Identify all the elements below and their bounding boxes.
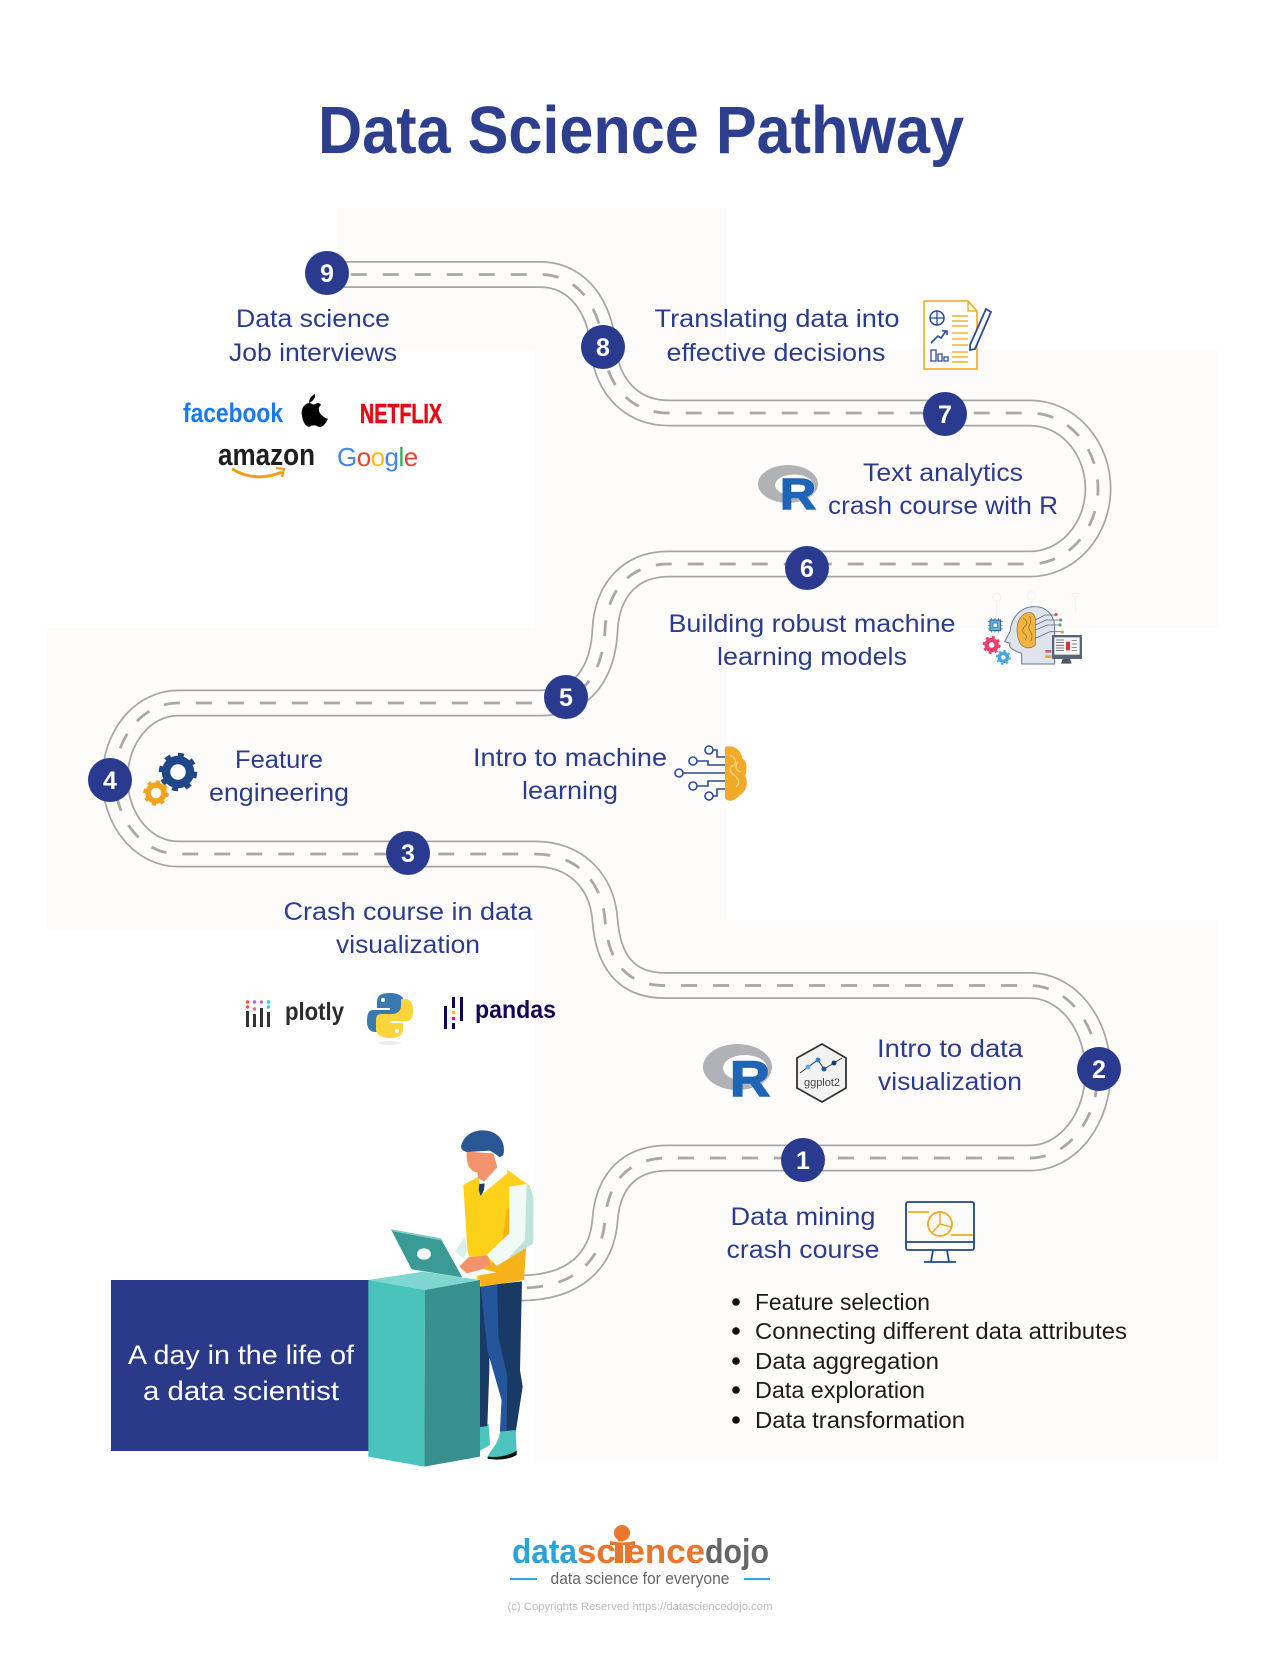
- logo: apple: [302, 394, 328, 427]
- step 5 marker: 5: [559, 684, 573, 712]
- bullet list: Data transformation: [755, 1407, 965, 1433]
- label: step 4: [209, 746, 349, 807]
- step 5 marker: [544, 675, 588, 719]
- logo: pandas: pandas: [475, 996, 556, 1024]
- label: step 9: [229, 305, 397, 367]
- step 9 marker: 9: [320, 260, 334, 288]
- step 7 marker: 7: [938, 401, 952, 429]
- step 4 marker: [88, 758, 132, 802]
- step 9 marker: [305, 251, 349, 295]
- step 1 marker: [781, 1138, 825, 1182]
- logo: amazon: amazon: [218, 437, 315, 472]
- brand logo: [510, 1525, 770, 1588]
- head: [461, 1130, 504, 1182]
- label: step 8: [654, 305, 900, 367]
- bullet list: [732, 1289, 1127, 1433]
- logo: google: Google: [337, 442, 418, 472]
- step 2 marker: 2: [1092, 1056, 1106, 1084]
- logo: plotly: plotly: [285, 998, 344, 1026]
- copyright line: (c) Copyrights Reserved https://datasciencedojo.com: [508, 1601, 772, 1613]
- icon: circuit brain: [675, 746, 747, 801]
- logo: facebook: facebook: [183, 398, 284, 428]
- brand logo: dojo: [705, 1533, 769, 1571]
- icon: R logo large: R: [730, 1051, 770, 1107]
- logo: python: [367, 993, 413, 1045]
- label: step 3: visualization: [336, 931, 480, 959]
- step 2 marker: [1077, 1047, 1121, 1091]
- label: step 2: Intro to data: [877, 1035, 1023, 1063]
- label: step 8: effective decisions: [666, 339, 886, 367]
- rear sleeve: [455, 1237, 467, 1258]
- illustration: data scientist at laptop: [368, 1130, 533, 1467]
- logo: plotly: [246, 998, 344, 1027]
- desk pedestal: [368, 1272, 480, 1467]
- logo: netflix: NETFLIX: [360, 398, 442, 429]
- label: step 6: [668, 610, 956, 671]
- label: step 7: [828, 459, 1058, 520]
- step 1 marker: 1: [796, 1147, 810, 1175]
- title: Data Science Pathway: [318, 93, 964, 168]
- back shoe: [478, 1424, 490, 1452]
- label: step 3: Crash course in data: [284, 898, 533, 926]
- step 3 marker: 3: [401, 840, 415, 868]
- company logos: [183, 394, 442, 477]
- step 7 marker: [923, 392, 967, 436]
- icon: report and pencil: [924, 301, 991, 369]
- label: step 9: Data science: [236, 305, 390, 333]
- step 8 marker: [581, 325, 625, 369]
- bullet list: Data exploration: [755, 1377, 925, 1403]
- label: step 5: [473, 744, 667, 805]
- label: step 3: [284, 898, 533, 959]
- label: step 4: engineering: [209, 779, 349, 807]
- label: step 2: [877, 1035, 1023, 1096]
- label: step 4: Feature: [235, 746, 323, 774]
- bullet list: Data aggregation: [755, 1348, 939, 1374]
- step 3 marker: [386, 831, 430, 875]
- step 6 marker: 6: [800, 555, 814, 583]
- label: step 8: Translating data into: [654, 305, 900, 333]
- callout box: a day in the life: [111, 1280, 371, 1451]
- step 6 marker: [785, 546, 829, 590]
- label: step 5: Intro to machine: [473, 744, 667, 772]
- label: step 1: [726, 1203, 880, 1264]
- step 4 marker: 4: [103, 767, 117, 795]
- brand logo: science: [577, 1533, 705, 1571]
- label: step 1: Data mining: [730, 1203, 876, 1231]
- icon: AI head: [984, 592, 1082, 664]
- bullet list: Feature selection: [755, 1289, 930, 1315]
- label: step 6: learning models: [717, 643, 907, 671]
- torso: [463, 1167, 530, 1287]
- step 8 marker: 8: [596, 334, 610, 362]
- label: step 5: learning: [522, 777, 618, 805]
- logo: pandas: [444, 996, 556, 1029]
- label: step 7: Text analytics: [863, 459, 1023, 487]
- front shoe: [488, 1430, 517, 1458]
- icon: gears: [145, 755, 195, 804]
- callout box: a day in the life: a data scientist: [143, 1376, 340, 1406]
- trousers: [478, 1281, 523, 1433]
- brand logo: data science for everyone: [550, 1569, 730, 1588]
- brand logo: data: [512, 1533, 578, 1571]
- icon: R logo: [758, 465, 818, 519]
- icon: ggplot2 hexagon: [797, 1044, 846, 1102]
- icon: ggplot2 hexagon: ggplot2: [804, 1077, 840, 1089]
- callout box: a day in the life: A day in the life of: [128, 1340, 355, 1370]
- winding road: [115, 274, 1098, 1288]
- near arm: [459, 1184, 533, 1273]
- label: step 1: crash course: [726, 1236, 880, 1264]
- laptop: [391, 1229, 497, 1278]
- bullet list: Connecting different data attributes: [755, 1318, 1127, 1344]
- label: step 7: crash course with R: [828, 492, 1058, 520]
- label: step 2: visualization: [878, 1068, 1022, 1096]
- icon: R logo: R: [780, 470, 816, 519]
- icon: monitor: [906, 1202, 974, 1262]
- label: step 6: Building robust machine: [668, 610, 956, 638]
- icon: R logo large: [703, 1044, 772, 1107]
- label: step 9: Job interviews: [229, 339, 397, 367]
